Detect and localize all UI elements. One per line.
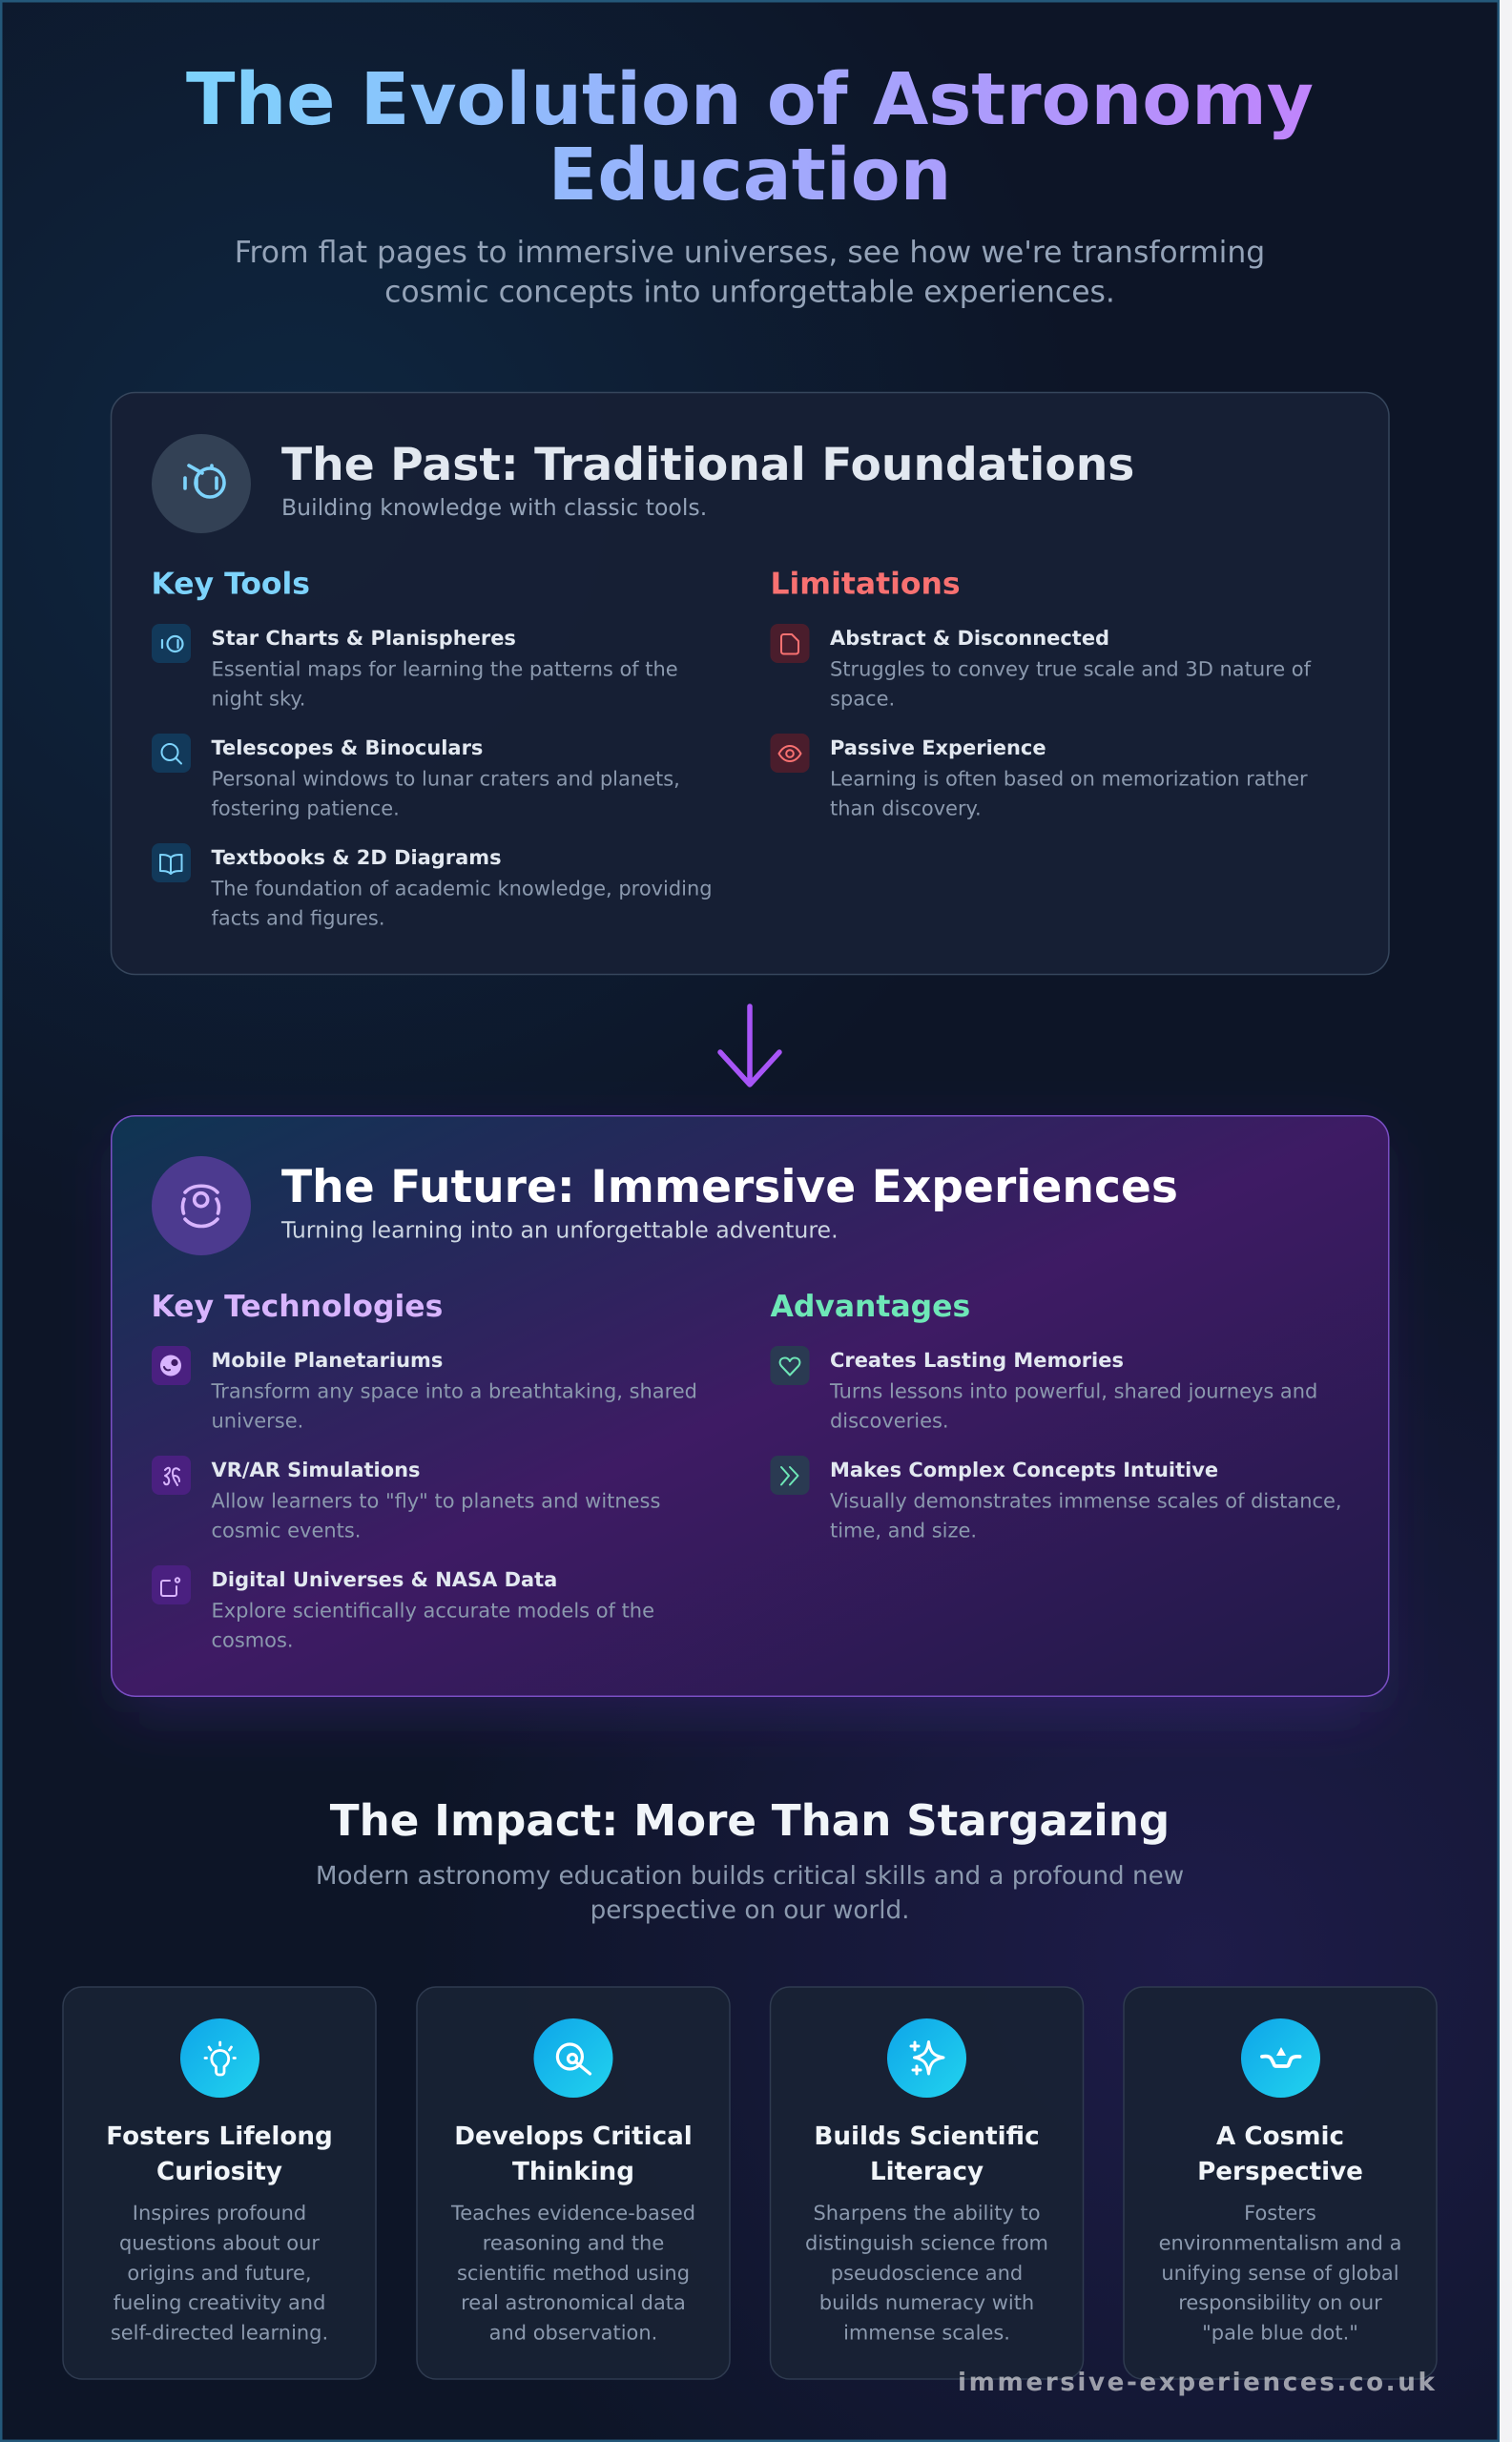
title xyxy=(186,57,1314,217)
body: scientific literacy: builds numeracy with xyxy=(819,2291,1034,2314)
title: Education xyxy=(549,133,951,217)
item: passive xyxy=(771,734,1308,820)
heading: curiosity xyxy=(106,2122,333,2186)
item: intuitive concepts: time, and size. xyxy=(830,1519,977,1542)
body: scientific literacy: distinguish science from xyxy=(805,2231,1048,2254)
card: cosmic perspective xyxy=(1124,1987,1437,2379)
heading: the past: The Past: Traditional Foundations xyxy=(281,439,1134,491)
heading: critical thinking: Thinking xyxy=(512,2158,634,2186)
item: star charts: Star Charts & Planispheres xyxy=(212,627,516,650)
item: lasting memories: discoveries. xyxy=(830,1410,949,1433)
item: lasting memories xyxy=(771,1346,1317,1433)
item: vr/ar simulations: Allow learners to "fly" to planets and witness xyxy=(212,1490,660,1513)
item: intuitive concepts xyxy=(771,1456,1342,1542)
subtitle: cosmic concepts into unforgettable experiences. xyxy=(384,275,1115,309)
body: curiosity xyxy=(111,2202,328,2345)
item: abstract: Struggles to convey true scale and 3D nature of xyxy=(830,658,1312,681)
item: passive: than discovery. xyxy=(830,797,982,820)
body: scientific literacy: Sharpens the ability to xyxy=(813,2202,1041,2225)
arrow xyxy=(720,1006,779,1085)
card: curiosity xyxy=(63,1987,376,2379)
body: curiosity: Inspires profound xyxy=(133,2202,306,2225)
heading: advantages: Advantages xyxy=(771,1290,970,1324)
item: textbooks: Textbooks & 2D Diagrams xyxy=(212,846,502,869)
heading: scientific literacy: Literacy xyxy=(870,2158,984,2186)
body: critical thinking: real astronomical data xyxy=(461,2291,686,2314)
body: critical thinking: reasoning and the xyxy=(483,2231,664,2254)
body: critical thinking: scientific method using xyxy=(457,2262,690,2285)
item: intuitive concepts: Makes Complex Concepts Intuitive xyxy=(830,1459,1218,1481)
heading: key tools: Key Tools xyxy=(151,567,310,601)
item: abstract xyxy=(771,624,1312,710)
item: textbooks: The foundation of academic knowledge, providing xyxy=(210,878,713,900)
body: curiosity: fueling creativity and xyxy=(114,2291,325,2314)
heading: cosmic perspective: Perspective xyxy=(1197,2158,1363,2186)
item: intuitive concepts: Visually demonstrates immense scales of distance, xyxy=(830,1490,1342,1513)
heading: critical thinking: Develops Critical xyxy=(454,2122,693,2151)
heading: impact: The Impact: More Than Stargazing xyxy=(330,1795,1170,1846)
panel glow xyxy=(120,1140,1379,1712)
body: cosmic perspective: "pale blue dot." xyxy=(1202,2322,1358,2345)
heading: curiosity: Fosters Lifelong xyxy=(106,2122,333,2151)
body: cosmic perspective: Fosters xyxy=(1244,2202,1316,2225)
impact intro text: perspective on our world. xyxy=(590,1896,909,1925)
heading: critical thinking xyxy=(454,2122,693,2186)
heading: scientific literacy xyxy=(814,2122,1040,2186)
item: digital universes xyxy=(152,1565,654,1652)
subtitle xyxy=(235,236,1265,309)
item: telescopes: Personal windows to lunar craters and planets, xyxy=(212,767,680,790)
subtitle: From flat pages to immersive universes, see how we're transforming xyxy=(235,236,1265,270)
tagline: the future: Turning learning into an unforgettable adventure. xyxy=(280,1217,839,1244)
body: curiosity: self-directed learning. xyxy=(111,2322,328,2345)
item: digital universes: cosmos. xyxy=(212,1629,294,1652)
card: critical thinking xyxy=(417,1987,730,2379)
watermark: immersive-experiences.co.uk xyxy=(958,2369,1437,2397)
body: curiosity: origins and future, xyxy=(127,2262,312,2285)
body: cosmic perspective: unifying sense of global xyxy=(1161,2262,1399,2285)
item: textbooks: facts and figures. xyxy=(212,906,385,929)
item: digital universes: Explore scientifically accurate models of the xyxy=(212,1599,654,1622)
body: scientific literacy xyxy=(805,2202,1048,2345)
tagline: the past: Building knowledge with classic tools. xyxy=(281,494,707,521)
impact intro text xyxy=(316,1862,1184,1925)
item: mobile planetariums xyxy=(152,1346,697,1433)
item: abstract: space. xyxy=(830,687,895,710)
item: mobile planetariums: Transform any space into a breathtaking, shared xyxy=(210,1379,697,1402)
heading: curiosity: Curiosity xyxy=(156,2158,282,2186)
item: abstract: Abstract & Disconnected xyxy=(830,627,1109,650)
icon: light bulb xyxy=(180,2018,259,2098)
body: critical thinking xyxy=(450,2202,695,2345)
body: cosmic perspective: responsibility on our xyxy=(1178,2291,1382,2314)
panel: the past xyxy=(111,393,1389,975)
item: vr/ar simulations xyxy=(152,1456,660,1542)
item: textbooks xyxy=(152,843,713,929)
item: telescopes: fostering patience. xyxy=(212,797,400,820)
item: lasting memories: Turns lessons into powerful, shared journeys and xyxy=(829,1379,1317,1402)
title: The Evolution of Astronomy xyxy=(186,57,1314,141)
item: star charts xyxy=(152,624,678,710)
heading: the future: The Future: Immersive Experiences xyxy=(281,1161,1178,1213)
icon: future header xyxy=(152,1156,251,1255)
heading: cosmic perspective xyxy=(1197,2122,1363,2186)
heading: key technologies: Key Technologies xyxy=(151,1290,443,1324)
icon: vessel xyxy=(1241,2018,1320,2098)
impact intro text: Modern astronomy education builds critical skills and a profound new xyxy=(316,1862,1184,1891)
body: scientific literacy: pseudoscience and xyxy=(831,2262,1023,2285)
body: critical thinking: Teaches evidence-based xyxy=(450,2202,695,2225)
item: lasting memories: Creates Lasting Memories xyxy=(830,1349,1124,1372)
item: passive: Passive Experience xyxy=(830,736,1046,759)
panel: the future xyxy=(112,1116,1389,1696)
item: star charts: Essential maps for learning the patterns of the xyxy=(212,658,678,681)
item: mobile planetariums: Mobile Planetariums xyxy=(212,1349,443,1372)
heading: cosmic perspective: A Cosmic xyxy=(1216,2122,1344,2151)
item: star charts: night sky. xyxy=(212,687,305,710)
item: digital universes: Digital Universes & NASA Data xyxy=(212,1568,557,1591)
card: scientific literacy xyxy=(771,1987,1084,2379)
item: telescopes: Telescopes & Binoculars xyxy=(212,736,483,759)
body: cosmic perspective xyxy=(1159,2202,1401,2345)
item: vr/ar simulations: cosmic events. xyxy=(212,1519,361,1542)
icon: magnifier xyxy=(534,2018,612,2098)
heading: limitations: Limitations xyxy=(771,567,961,601)
body: cosmic perspective: environmentalism and a xyxy=(1159,2231,1401,2254)
item: vr/ar simulations: VR/AR Simulations xyxy=(212,1459,420,1481)
body: critical thinking: and observation. xyxy=(489,2322,657,2345)
body: curiosity: questions about our xyxy=(119,2231,320,2254)
item: mobile planetariums: universe. xyxy=(212,1410,303,1433)
item: passive: Learning is often based on memorization rather xyxy=(830,767,1308,790)
icon: sparkles xyxy=(887,2018,966,2098)
icon: past header xyxy=(152,434,251,533)
heading: scientific literacy: Builds Scientific xyxy=(814,2122,1040,2151)
body: scientific literacy: immense scales. xyxy=(843,2322,1010,2345)
item: telescopes xyxy=(152,734,680,820)
